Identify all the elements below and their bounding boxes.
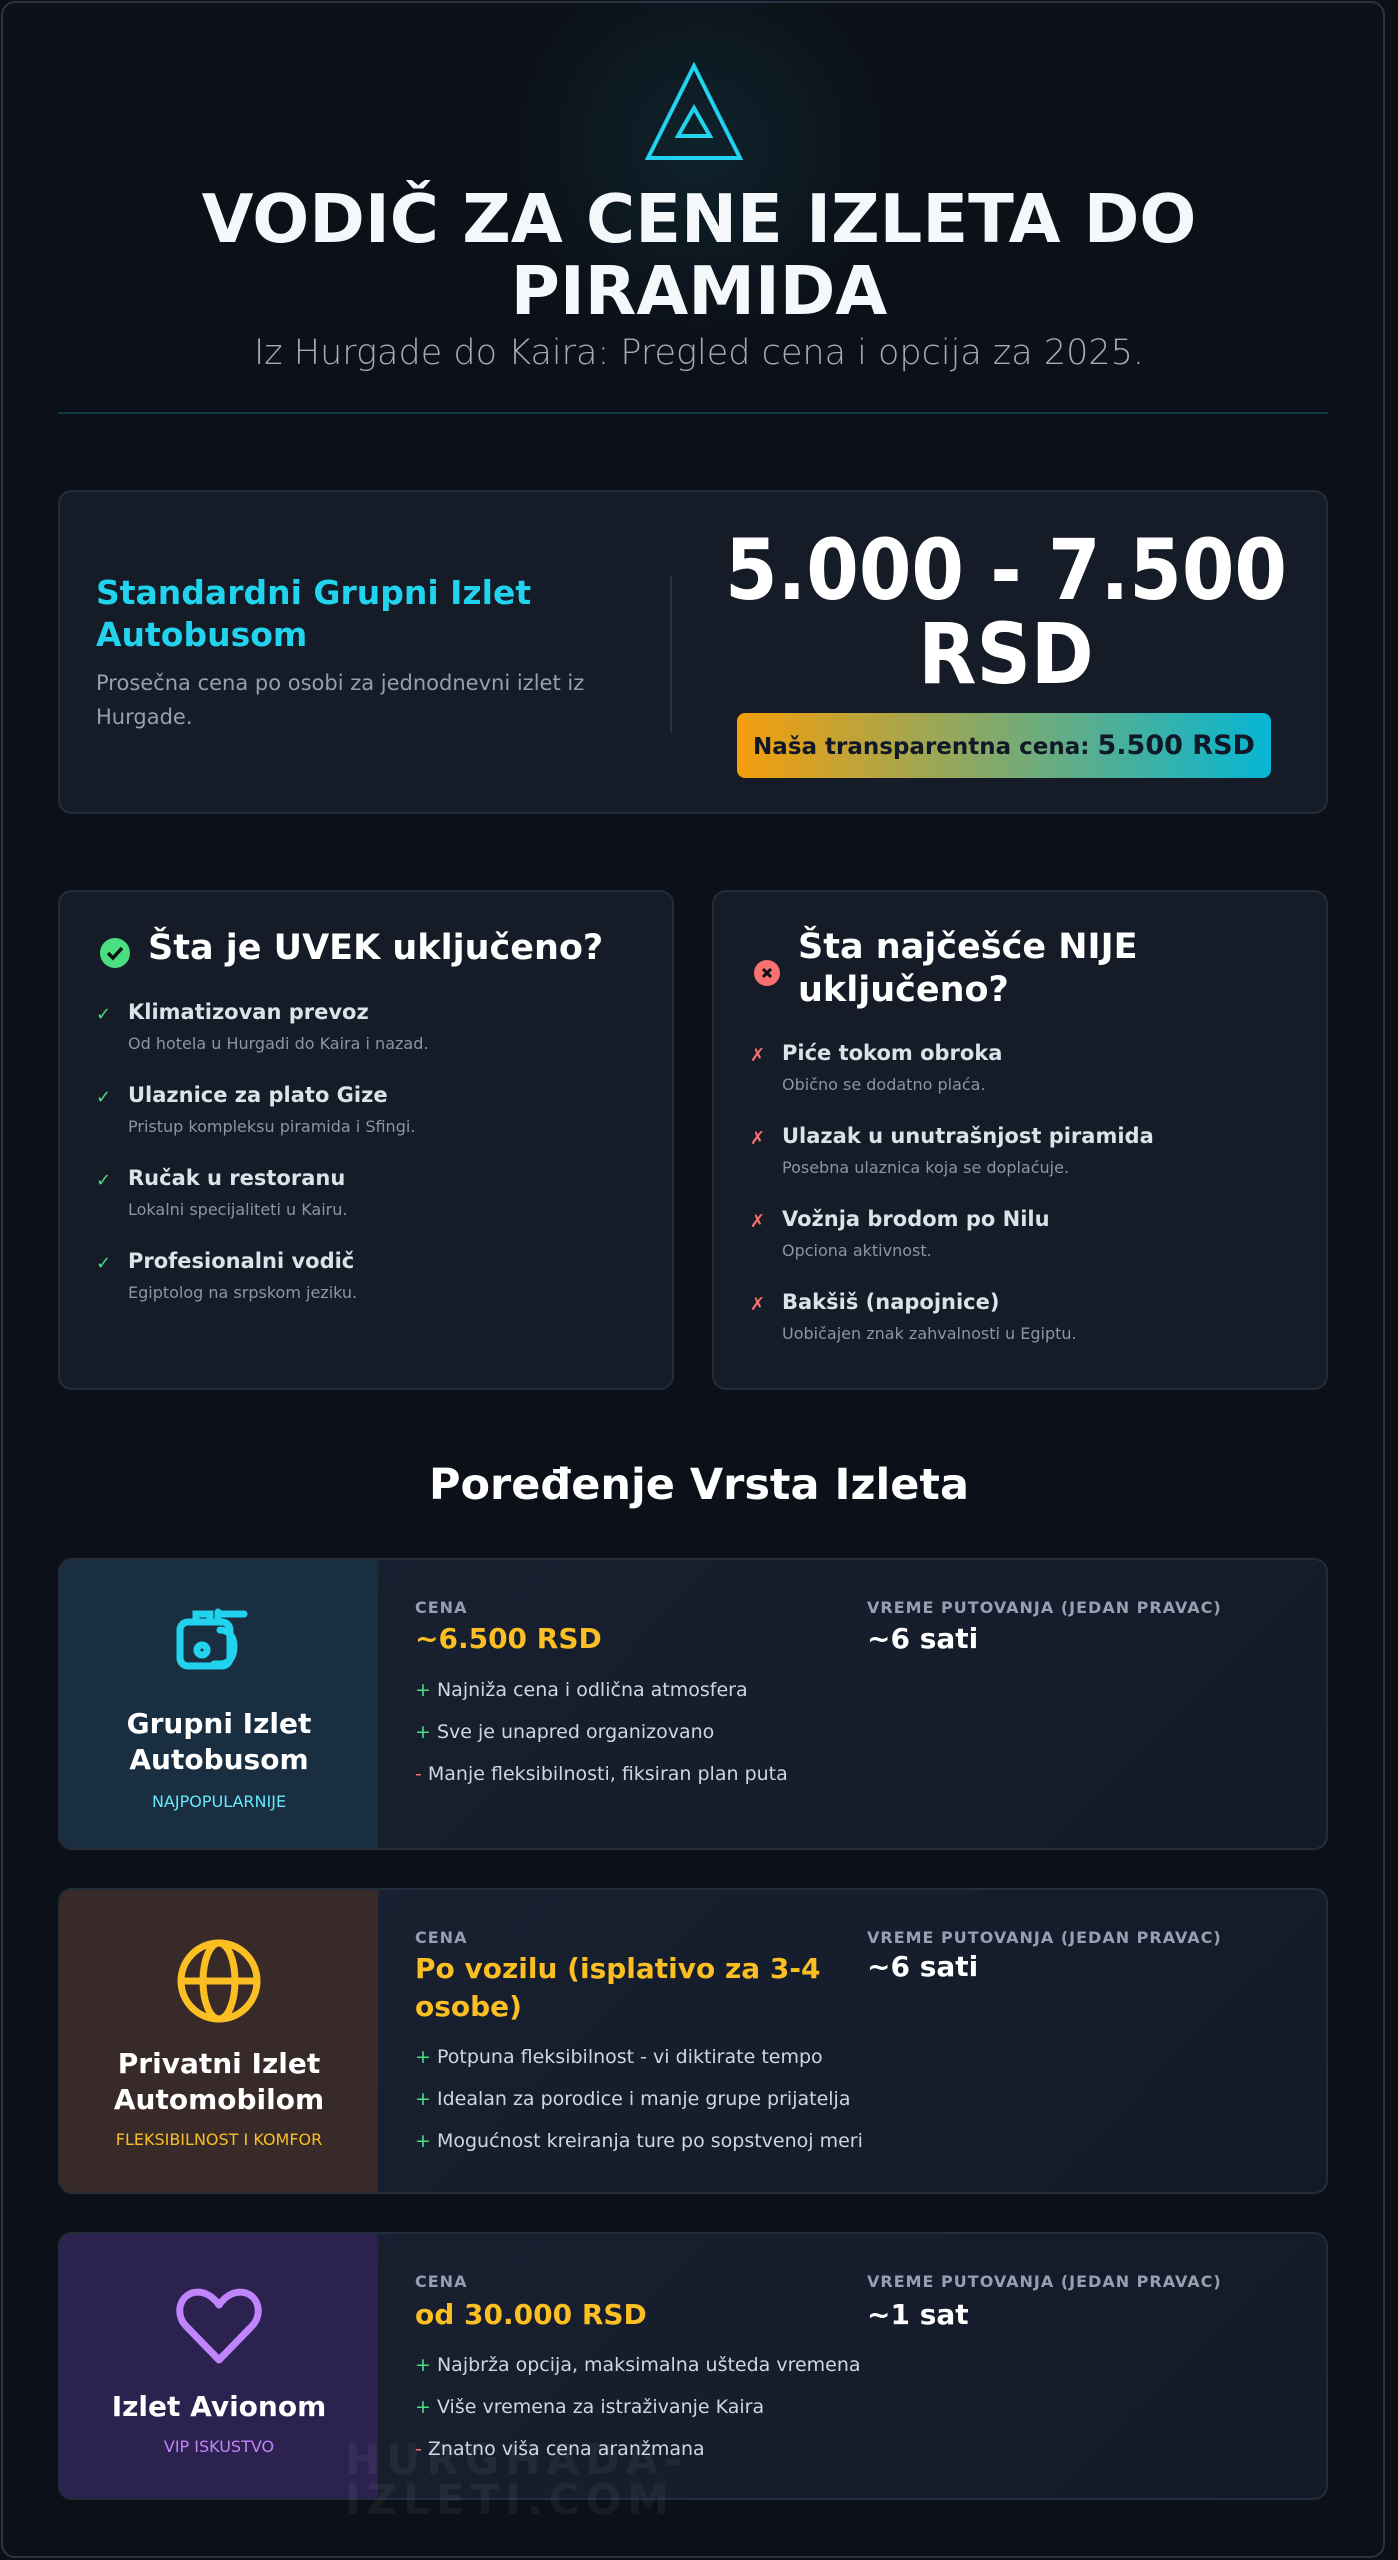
list: not included items	[750, 1041, 1154, 1343]
left panel: car: Privatni Izlet	[118, 2047, 320, 2080]
left panel: car: Automobilom	[114, 2083, 324, 2116]
list: not included items: ✗	[750, 1045, 765, 1066]
card: group bus tour: VREME PUTOVANJA (JEDAN PRAVAC)	[867, 1598, 1222, 1617]
description: Prosečna cena po osobi za jednodnevni izlet iz Hurgade.	[96, 671, 584, 729]
heading: not included: Šta najčešće NIJE	[798, 927, 1138, 967]
list: not included items: ✗	[750, 1211, 765, 1232]
list: included items: Pristup kompleksu piramida i Sfingi.	[128, 1117, 415, 1136]
watermark	[345, 2435, 688, 2524]
icon: bus/camera	[176, 1608, 248, 1670]
list: not included items: Ulazak u unutrašnjost piramida	[782, 1124, 1154, 1148]
list: not included items: Opciona aktivnost.	[782, 1241, 932, 1260]
card: group bus tour: - Manje fleksibilnosti, fiksiran plan puta	[415, 1763, 788, 1785]
list: included items	[96, 1000, 428, 1302]
big price	[725, 521, 1287, 703]
left panel: bus: Grupni Izlet	[127, 1707, 311, 1740]
watermark: HURGHADA-	[345, 2435, 688, 2484]
card: private car tour: ~6 sati	[867, 1950, 978, 1983]
icon: globe	[178, 1940, 260, 2022]
title: PIRAMIDA	[511, 252, 887, 330]
list: not included items: Piće tokom obroka	[782, 1041, 1002, 1065]
card: group bus tour: + Sve je unapred organizovano	[415, 1721, 714, 1743]
list: not included items: ✗	[750, 1294, 765, 1315]
heading: not included: uključeno?	[798, 970, 1009, 1010]
icon: pyramid	[644, 62, 744, 160]
icon: x	[754, 960, 780, 986]
card: plane tour	[58, 2232, 1328, 2500]
left panel: plane	[60, 2234, 378, 2502]
card: plane tour: VREME PUTOVANJA (JEDAN PRAVAC)	[867, 2272, 1222, 2291]
badge: our price	[737, 713, 1271, 778]
list: included items: Egiptolog na srpskom jeziku.	[128, 1283, 357, 1302]
card: plane tour: + Više vremena za istraživanje Kaira	[415, 2396, 764, 2418]
card: plane tour: + Najbrža opcija, maksimalna ušteda vremena	[415, 2354, 861, 2376]
card: group bus tour: ~6.500 RSD	[415, 1622, 602, 1655]
list: not included items: Bakšiš (napojnice)	[782, 1290, 999, 1314]
list: not included items: Obično se dodatno plaća.	[782, 1075, 986, 1094]
list: included items: ✓	[96, 1004, 111, 1025]
card: plane tour: CENA	[415, 2272, 467, 2291]
list: included items: ✓	[96, 1170, 111, 1191]
left panel: bus	[60, 1560, 378, 1852]
card: private car tour	[58, 1888, 1328, 2194]
card: group bus tour: + Najniža cena i odlična atmosfera	[415, 1679, 748, 1701]
icon: heart	[176, 2288, 262, 2364]
card: plane tour: ~1 sat	[867, 2298, 969, 2331]
left panel: bus: NAJPOPULARNIJE	[152, 1792, 286, 1811]
card: group bus tour	[58, 1558, 1328, 1850]
big price: RSD	[918, 605, 1094, 703]
card: private car tour: + Mogućnost kreiranja ture po sopstvenoj meri	[415, 2130, 863, 2152]
card: plane tour: od 30.000 RSD	[415, 2298, 647, 2331]
subtitle: Iz Hurgade do Kaira: Pregled cena i opcija za 2025.	[254, 333, 1144, 373]
list: included items: Ručak u restoranu	[128, 1166, 345, 1190]
panel: not included	[712, 890, 1328, 1390]
title: VODIČ ZA CENE IZLETA DO	[202, 180, 1196, 258]
list: not included items: Posebna ulaznica koja se doplaćuje.	[782, 1158, 1069, 1177]
list: included items: Lokalni specijaliteti u Kairu.	[128, 1200, 347, 1219]
card: group bus tour: CENA	[415, 1598, 467, 1617]
icon: check	[100, 938, 130, 968]
list: not included items: ✗	[750, 1128, 765, 1149]
heading: not included	[754, 926, 1138, 1010]
list: included items: Od hotela u Hurgadi do Kaira i nazad.	[128, 1034, 428, 1053]
left panel: plane: Izlet Avionom	[112, 2390, 326, 2423]
card: private car tour: + Idealan za porodice i manje grupe prijatelja	[415, 2088, 850, 2110]
heading: included: Šta je UVEK uključeno?	[148, 928, 603, 968]
list: not included items: Vožnja brodom po Nilu	[782, 1207, 1050, 1231]
panel: included	[58, 890, 674, 1390]
list: included items: ✓	[96, 1087, 111, 1108]
title	[202, 180, 1196, 330]
card: private car tour: Po vozilu (isplativo za 3-4 osobe)	[415, 1952, 821, 2023]
left panel: car: FLEKSIBILNOST I KOMFOR	[116, 2130, 322, 2149]
left panel: bus: Autobusom	[129, 1743, 309, 1776]
badge: our price: Naša transparentna cena: 5.500 RSD	[753, 730, 1255, 761]
card: group bus tour: ~6 sati	[867, 1622, 978, 1655]
card: private car tour: CENA	[415, 1928, 467, 1947]
section heading: comparison: Poređenje Vrsta Izleta	[429, 1460, 969, 1510]
left panel: car	[60, 1890, 378, 2196]
list: not included items: Uobičajen znak zahvalnosti u Egiptu.	[782, 1324, 1077, 1343]
list: included items: Ulaznice za plato Gize	[128, 1083, 388, 1107]
card: private car tour: + Potpuna fleksibilnost - vi diktirate tempo	[415, 2046, 823, 2068]
panel: price summary	[58, 490, 1328, 814]
heading: standard group tour: Standardni Grupni Izlet Autobusom	[96, 573, 531, 654]
watermark: IZLETI.COM	[345, 2475, 675, 2524]
list: included items: Klimatizovan prevoz	[128, 1000, 369, 1024]
card: private car tour: VREME PUTOVANJA (JEDAN PRAVAC)	[867, 1928, 1222, 1947]
list: included items: Profesionalni vodič	[128, 1249, 354, 1273]
list: included items: ✓	[96, 1253, 111, 1274]
big price: 5.000 - 7.500	[725, 521, 1287, 619]
left panel: plane: VIP ISKUSTVO	[164, 2437, 274, 2456]
card: plane tour: - Znatno viša cena aranžmana	[415, 2438, 705, 2460]
